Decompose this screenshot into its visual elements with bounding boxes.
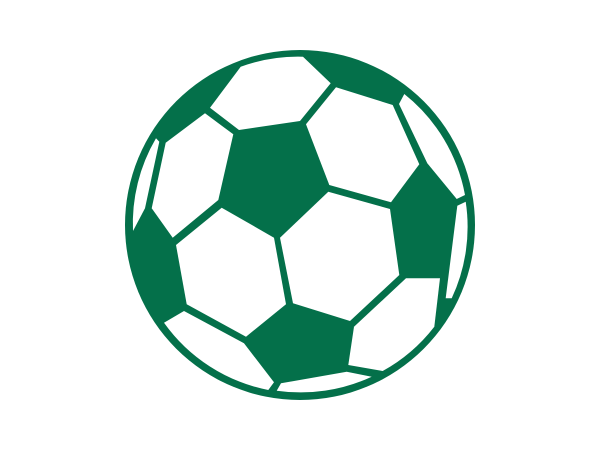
ball body <box>125 50 475 400</box>
white ball panels <box>133 57 468 392</box>
panel: upper-left hexagon <box>152 113 233 238</box>
panel: bottom sliver <box>277 372 372 392</box>
panel: centre-left hexagon <box>176 208 286 337</box>
panel: lower-right sliver <box>446 202 468 298</box>
panel: top-right hexagon <box>306 87 419 202</box>
panel: top hexagon <box>210 57 331 130</box>
panel: left sliver <box>133 138 159 231</box>
panel: bottom-left cell <box>164 311 274 390</box>
panel: bottom-right cell <box>348 278 440 371</box>
panel: upper-right sliver <box>399 94 465 199</box>
panel: centre-right hexagon <box>280 192 399 321</box>
